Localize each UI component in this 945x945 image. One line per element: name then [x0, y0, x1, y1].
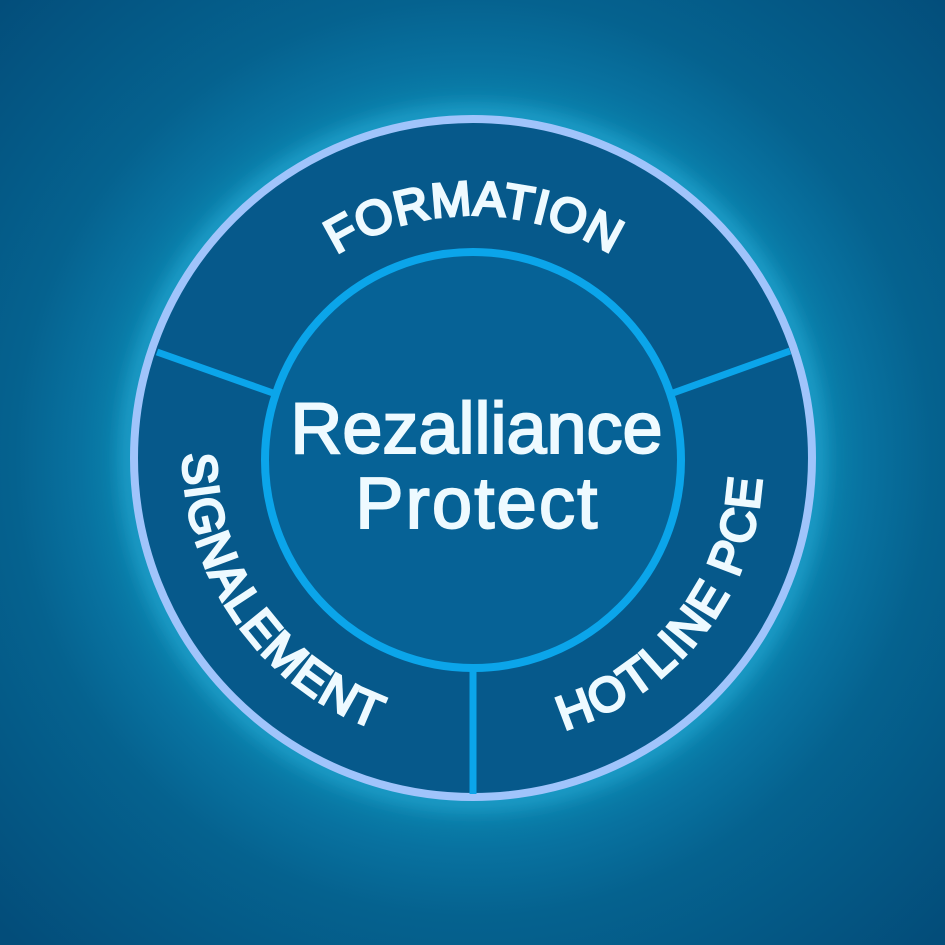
divider: formation / signalement [157, 352, 273, 393]
center title [290, 389, 663, 544]
center title: Protect [355, 464, 600, 544]
segment label: FORMATION: FORMATION [322, 180, 626, 254]
outer disc with ring [134, 119, 812, 797]
divider: formation / hotline [673, 351, 790, 393]
ring glow [130, 115, 816, 801]
divider: signalement / hotline [470, 668, 476, 794]
inner circle [265, 252, 681, 668]
segment label: HOTLINE PCE: HOTLINE PCE [554, 476, 764, 731]
center title: Rezalliance [290, 389, 663, 469]
segment label: SIGNALEMENT: SIGNALEMENT [182, 454, 388, 726]
